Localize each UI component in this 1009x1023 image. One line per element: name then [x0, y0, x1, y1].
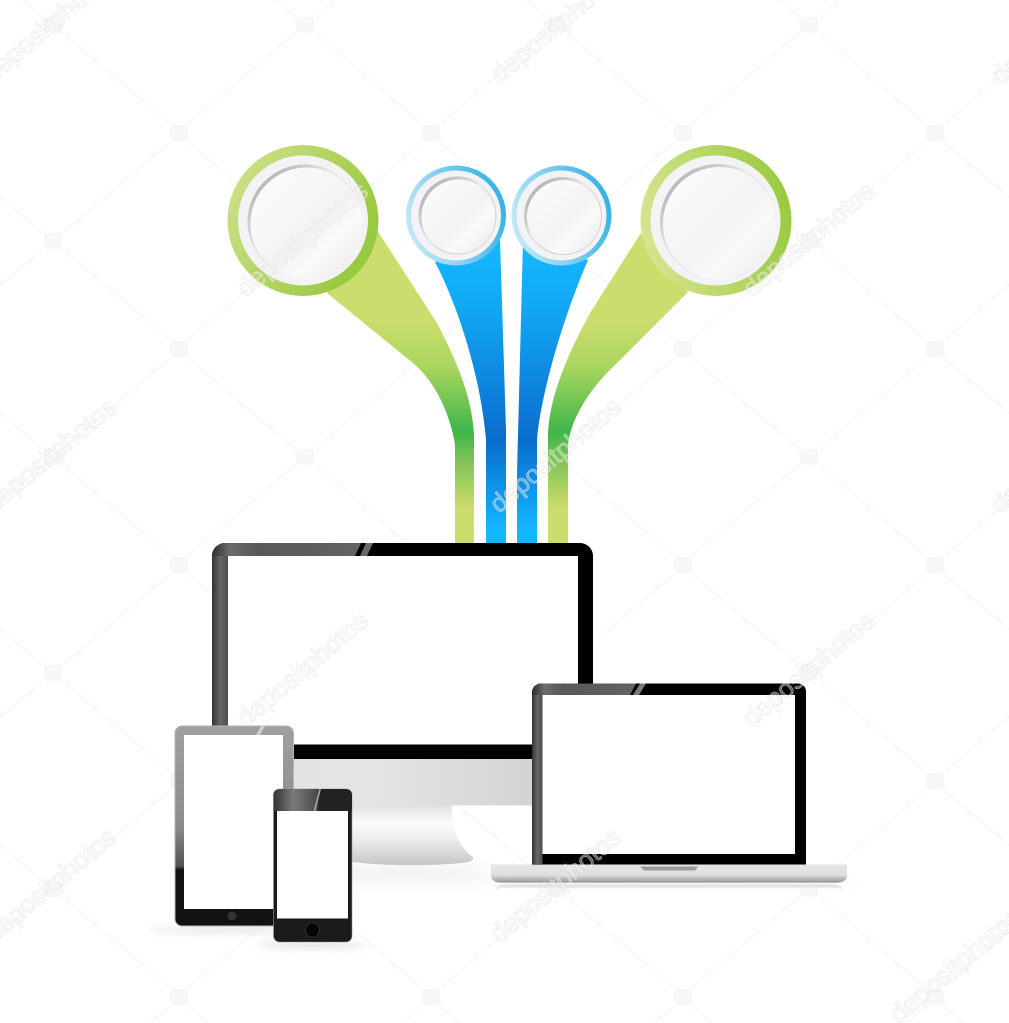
phone: [274, 789, 352, 942]
laptop reflection: [495, 884, 843, 892]
ribbon: left blue: [435, 240, 506, 543]
monitor screen: [228, 556, 578, 744]
watermark text: depositphotos: [484, 392, 627, 519]
monitor side glare: [212, 556, 228, 736]
phone screen: [277, 811, 348, 918]
ribbon: left green: [327, 230, 474, 543]
monitor stand: [350, 805, 473, 865]
phone body: [274, 789, 352, 942]
monitor chin: [212, 758, 537, 806]
tablet screen: [184, 735, 283, 909]
ribbon: right green: [548, 233, 688, 543]
phone home button: [306, 923, 320, 937]
monitor: [212, 543, 593, 865]
device shadows: [147, 867, 860, 948]
tablet: [175, 726, 294, 926]
tablet slash: [256, 726, 265, 735]
monitor bezel slash: [360, 543, 373, 556]
watermark text: depositphotos: [737, 606, 880, 733]
tablet frame: [175, 726, 294, 926]
laptop screen: [542, 695, 795, 854]
laptop notch: [640, 866, 698, 870]
ribbons and circles: [228, 145, 792, 543]
laptop base: [491, 864, 847, 882]
laptop lid slash: [633, 684, 646, 695]
laptop: [491, 684, 847, 892]
watermark text: depositphotos: [231, 176, 374, 303]
laptop side glare: [532, 692, 542, 864]
monitor bezel: [212, 543, 593, 759]
phone slash: [314, 789, 321, 811]
circle: large right: [640, 145, 792, 296]
laptop lid: [532, 684, 806, 865]
ribbon: right blue: [517, 240, 588, 543]
circle: small left: [406, 166, 506, 266]
phone top glare: [274, 789, 352, 811]
watermark text: depositphotos: [484, 822, 627, 949]
watermark text: depositphotos: [231, 606, 374, 733]
monitor top glare: [212, 543, 361, 556]
circle: large left: [228, 145, 378, 296]
watermark text: depositphotos: [737, 176, 880, 303]
laptop top glare: [532, 684, 636, 695]
tablet button: [228, 912, 236, 920]
circle: small right: [512, 166, 612, 266]
